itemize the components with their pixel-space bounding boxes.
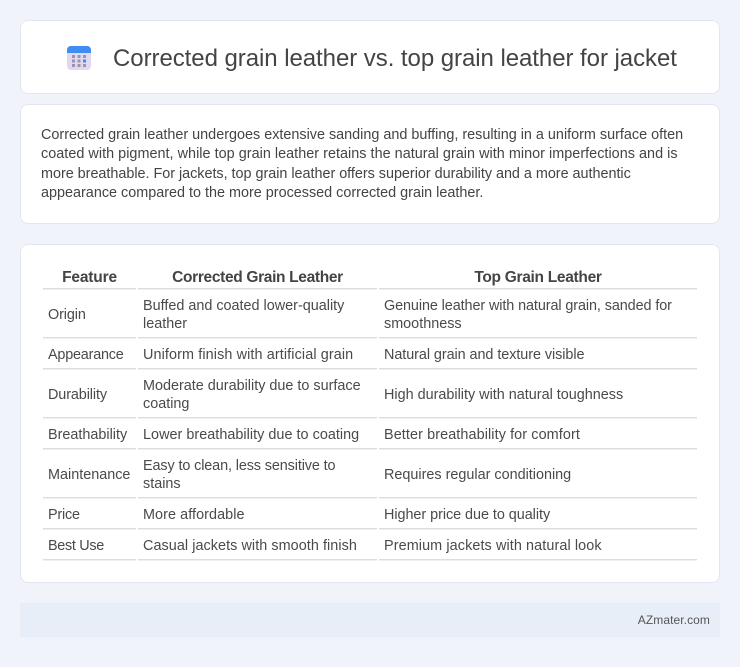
table header: Feature	[62, 269, 117, 286]
table header: Corrected Grain Leather	[172, 269, 343, 286]
row: Durability: coating	[143, 396, 189, 412]
row: Price: Higher price due to quality	[384, 507, 550, 523]
title: Corrected grain leather vs. top grain leather for jacket	[113, 45, 677, 72]
row: Appearance: Uniform finish with artificial grain	[143, 347, 353, 363]
row: Appearance: Appearance	[48, 347, 124, 363]
table header	[62, 269, 602, 286]
row: Maintenance: stains	[143, 476, 181, 492]
row: Price: Price	[48, 507, 80, 523]
row: Price: More affordable	[143, 507, 245, 523]
row: Best Use	[48, 538, 602, 554]
text block: summary: Corrected grain leather undergoes extensive sanding and buffing, resulting in a uniform surface often	[41, 127, 683, 143]
footer bar	[20, 603, 720, 637]
row: Durability: Moderate durability due to surface	[143, 378, 361, 394]
row: Maintenance: Easy to clean, less sensitive to	[143, 458, 335, 474]
row: Maintenance	[48, 458, 571, 492]
row: Appearance: Natural grain and texture visible	[384, 347, 584, 363]
row: Maintenance: Requires regular conditioning	[384, 467, 571, 483]
row: Best Use: Premium jackets with natural look	[384, 538, 602, 554]
text block: summary: appearance compared to the more processed corrected grain leather.	[41, 185, 483, 201]
row: Origin: smoothness	[384, 316, 462, 332]
row: Origin: Genuine leather with natural grain, sanded for	[384, 298, 672, 314]
row: Durability	[48, 378, 623, 412]
row: Price	[48, 507, 550, 523]
row: Origin	[48, 298, 672, 332]
row: Best Use: Casual jackets with smooth finish	[143, 538, 357, 554]
row: Appearance	[48, 347, 584, 363]
footer source text: AZmater.com	[638, 613, 710, 627]
icon: calendar	[67, 46, 91, 70]
row: Durability: Durability	[48, 387, 107, 403]
text block: summary	[41, 127, 683, 201]
text block: summary: coated with pigment, while top grain leather retains the natural grain with minor imperfections and is	[41, 146, 678, 162]
row: Breathability: Lower breathability due to coating	[143, 427, 359, 443]
table: comparison	[43, 269, 697, 561]
panel: comparison table card	[20, 244, 720, 583]
row: Origin: Buffed and coated lower-quality	[143, 298, 344, 314]
row: Breathability: Better breathability for comfort	[384, 427, 580, 443]
panel: title card	[20, 20, 720, 94]
row: Maintenance: Maintenance	[48, 467, 130, 483]
table header: Top Grain Leather	[474, 269, 602, 286]
row: Breathability: Breathability	[48, 427, 127, 443]
text block: summary: more breathable. For jackets, top grain leather offers superior durability and a more authentic	[41, 166, 631, 182]
row: Durability: High durability with natural toughness	[384, 387, 623, 403]
row: Origin: Origin	[48, 307, 86, 323]
panel: summary card	[20, 104, 720, 224]
row: Breathability	[48, 427, 580, 443]
row: Origin: leather	[143, 316, 187, 332]
row: Best Use: Best Use	[48, 538, 104, 554]
